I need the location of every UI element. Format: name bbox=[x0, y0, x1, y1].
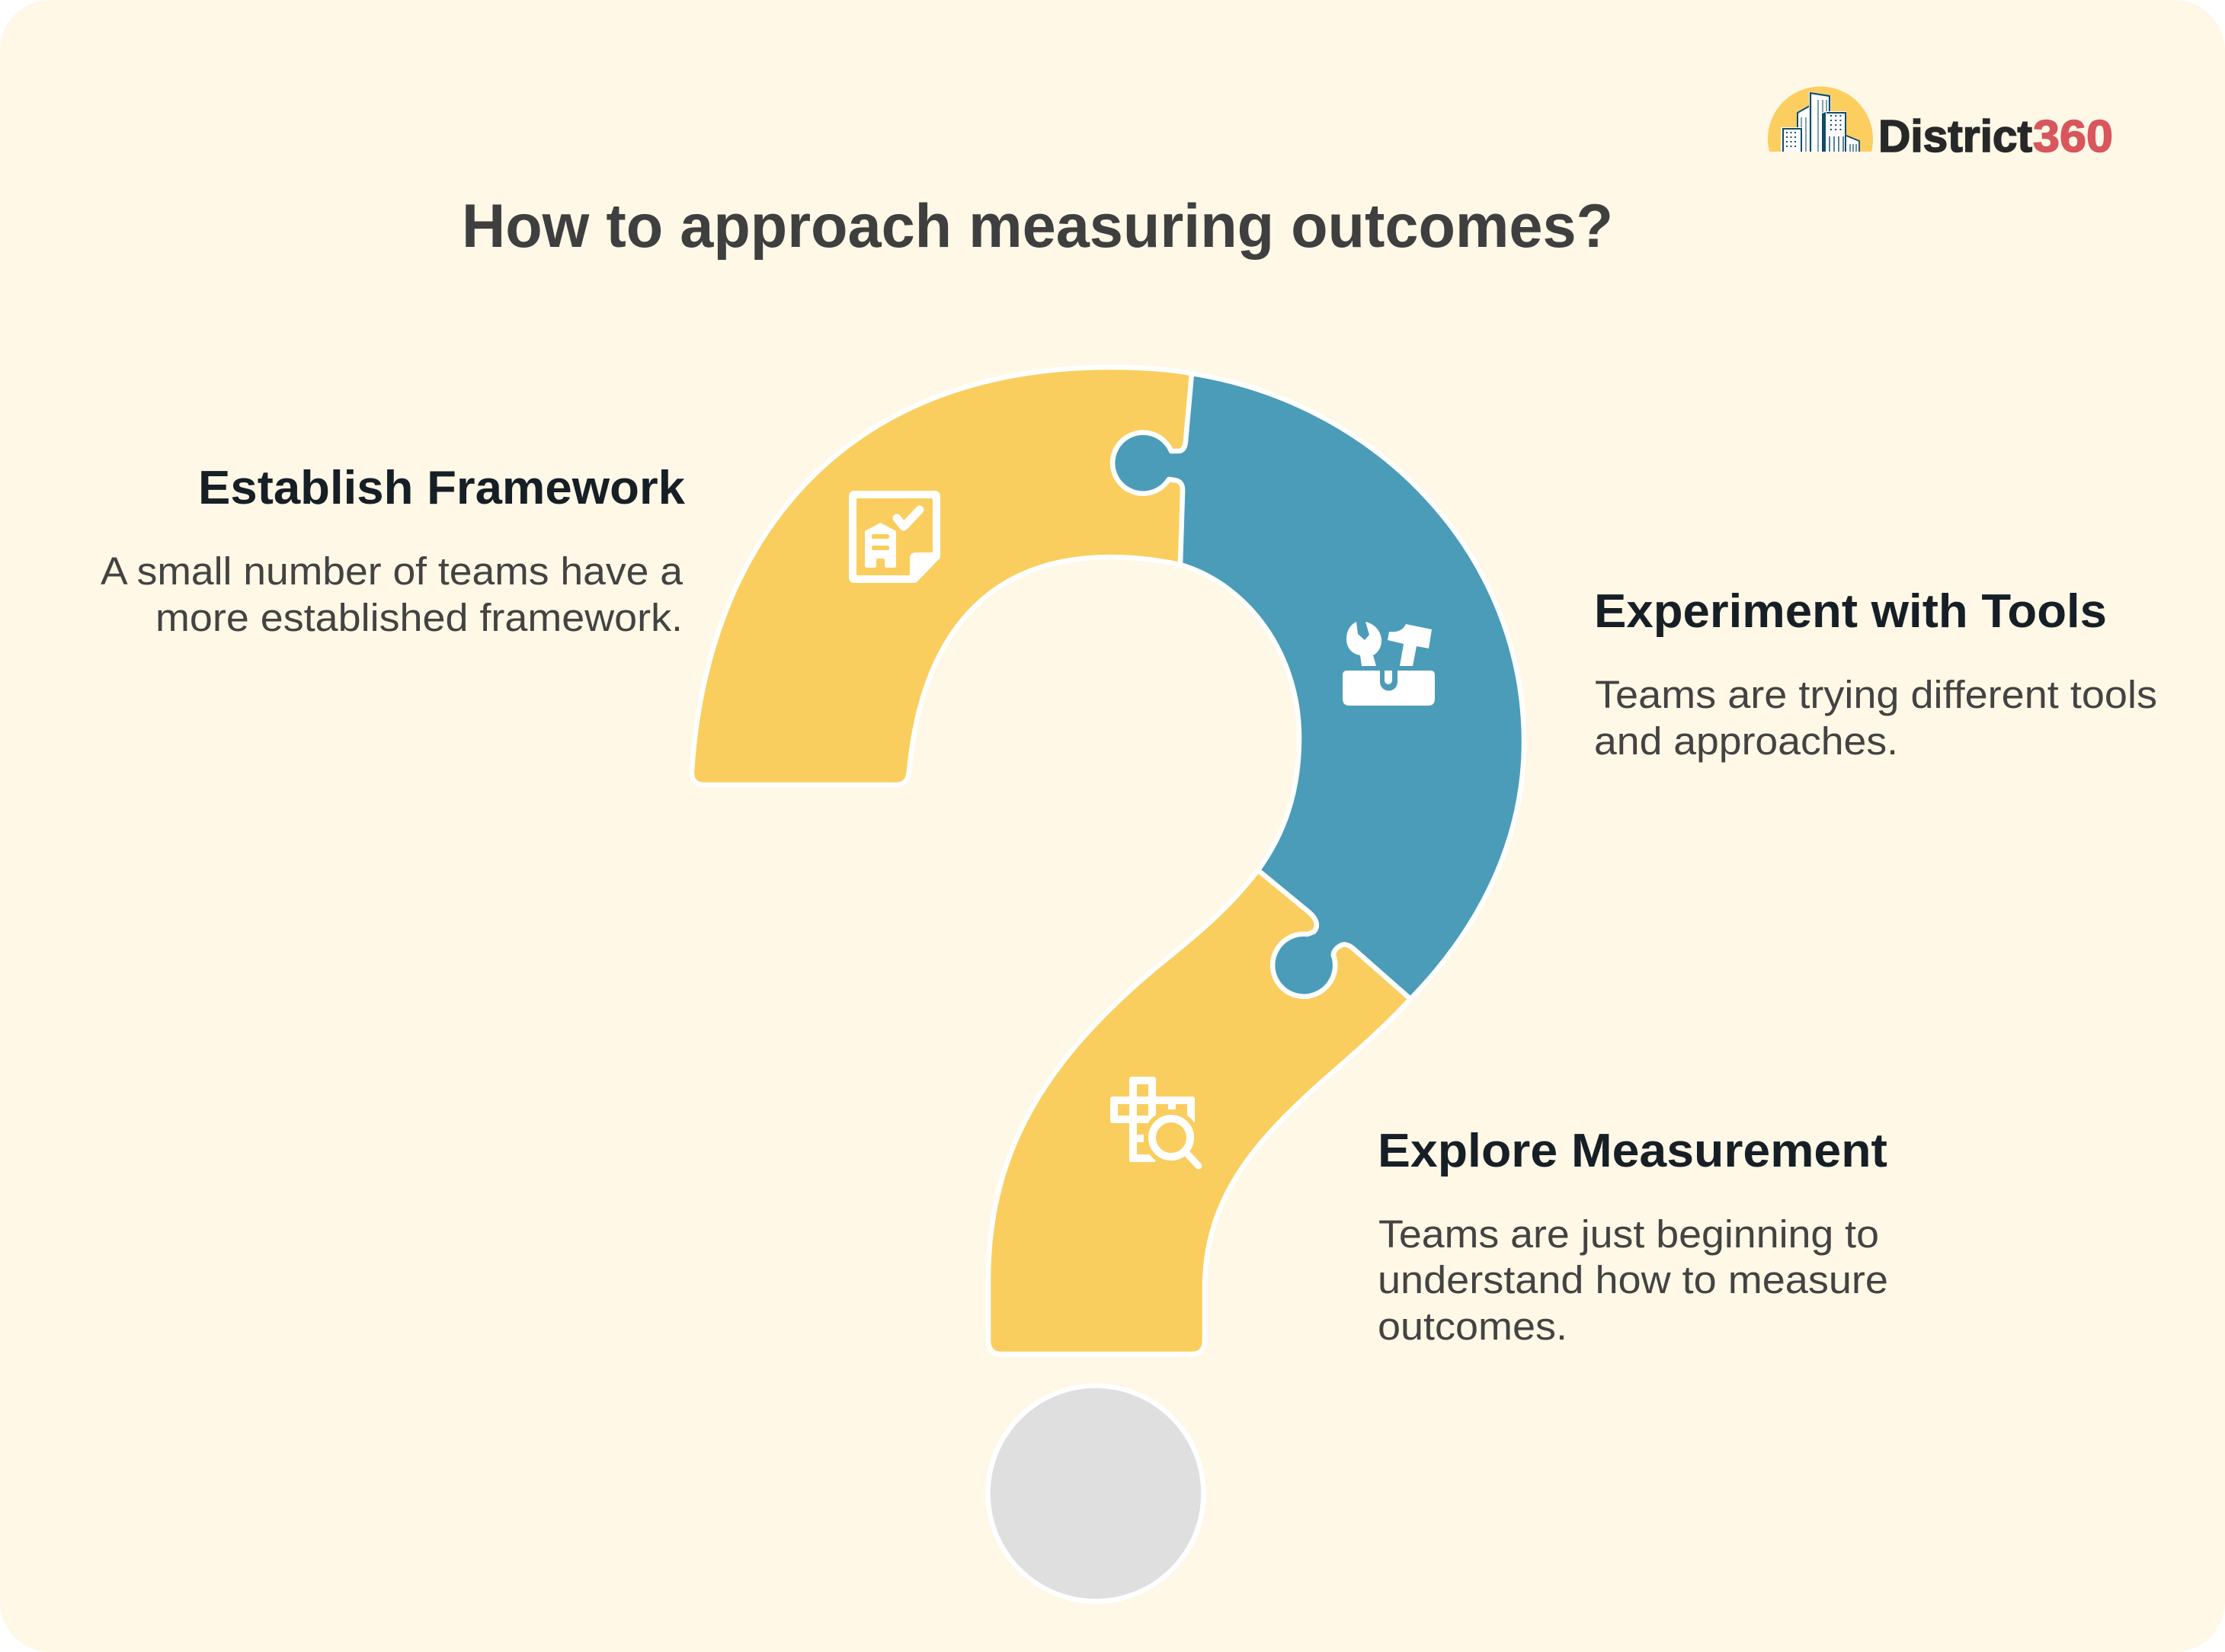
logo wordmark: District bbox=[1878, 111, 2032, 162]
logo icon: sun and city buildings bbox=[1768, 87, 1873, 152]
piece: establish framework (yellow arc) bbox=[692, 367, 1192, 785]
heading: Establish Framework bbox=[198, 462, 686, 514]
description: outcomes. bbox=[1378, 1305, 1567, 1348]
description: A small number of teams have a bbox=[101, 549, 684, 593]
dot of the question mark bbox=[988, 1385, 1204, 1602]
text block: establish framework bbox=[101, 462, 686, 639]
description: Teams are just beginning to bbox=[1378, 1212, 1879, 1256]
heading: Explore Measurement bbox=[1378, 1125, 1887, 1177]
piece: experiment with tools (blue arc) bbox=[1112, 373, 1524, 999]
icon: document with building and check bbox=[849, 491, 940, 583]
text block: explore measurement bbox=[1378, 1125, 1888, 1348]
title: How to approach measuring outcomes? bbox=[462, 192, 1613, 261]
description: Teams are trying different tools bbox=[1595, 673, 2157, 716]
logo: District360 bbox=[1768, 87, 2113, 162]
icon: ruler grid with magnifier bbox=[1110, 1077, 1199, 1166]
logo wordmark: 360 bbox=[2033, 111, 2113, 162]
piece: explore measurement (yellow stem) bbox=[988, 870, 1410, 1354]
question mark diagram bbox=[692, 367, 1524, 1602]
description: understand how to measure bbox=[1378, 1258, 1888, 1301]
text block: experiment with tools bbox=[1594, 585, 2157, 763]
description: and approaches. bbox=[1594, 719, 1898, 763]
description: more established framework. bbox=[155, 596, 683, 639]
icon: toolbox with wrench and hammer bbox=[1343, 622, 1435, 706]
heading: Experiment with Tools bbox=[1594, 585, 2107, 638]
